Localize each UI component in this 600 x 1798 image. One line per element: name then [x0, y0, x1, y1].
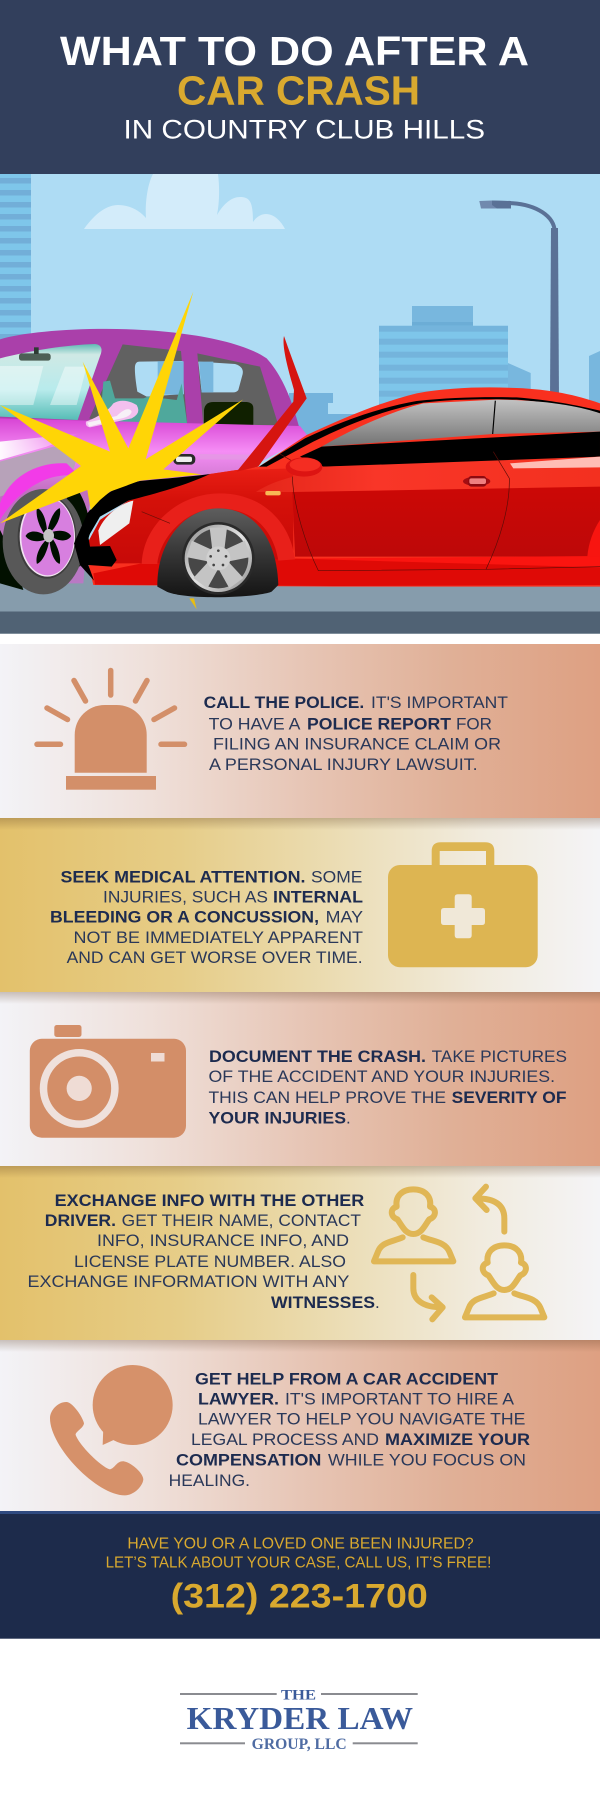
text: seek medical attention: AND CAN GET WORSE OVER TIME. [67, 948, 363, 967]
text: document the crash: SEVERITY OF [452, 1088, 566, 1107]
text: exchange info: . [375, 1293, 380, 1312]
text: get help from a lawyer: LEGAL PROCESS AND [191, 1430, 379, 1449]
text: get help from a lawyer: MAXIMIZE YOUR [385, 1430, 530, 1449]
text: seek medical attention: NOT BE IMMEDIATELY APPARENT [74, 928, 363, 947]
street lamp [479, 200, 559, 400]
road [0, 570, 600, 634]
text: seek medical attention [50, 867, 363, 967]
text: get help from a lawyer: WHILE YOU FOCUS ON [328, 1450, 526, 1470]
building left [0, 174, 31, 344]
text: call the police: A PERSONAL INJURY LAWSUIT. [209, 755, 478, 774]
icon: first aid kit [388, 842, 538, 967]
text: get help from a lawyer [169, 1370, 530, 1490]
building right [289, 306, 600, 440]
title line 1: WHAT TO DO AFTER A [60, 28, 529, 74]
icon: camera [30, 1025, 186, 1138]
panel: document the crash [0, 992, 600, 1166]
panel: call the police [0, 644, 600, 818]
text: seek medical attention: INTERNAL [273, 888, 363, 907]
icon: siren [37, 670, 184, 790]
illustration: car crash scene [0, 174, 600, 634]
text: exchange info: EXCHANGE INFORMATION WITH ANY [28, 1272, 349, 1291]
text: document the crash [208, 1047, 567, 1128]
black crushed bumper [74, 474, 210, 581]
text: call the police: IT'S IMPORTANT [371, 693, 508, 712]
text: exchange info: EXCHANGE INFO WITH THE OTHER [55, 1191, 364, 1210]
logo: the kryder law group: GROUP, LLC [252, 1736, 347, 1753]
starburst impact [0, 292, 243, 609]
text: call the police: POLICE REPORT [307, 714, 452, 733]
text: seek medical attention: INJURIES, SUCH AS [103, 888, 268, 907]
text: get help from a lawyer: IT'S IMPORTANT TO HIRE A [285, 1390, 515, 1408]
flat front tyre [157, 508, 278, 597]
cta line 1: HAVE YOU OR A LOVED ONE BEEN INJURED? [127, 1535, 474, 1552]
text: seek medical attention: SEEK MEDICAL ATTENTION. [60, 867, 306, 886]
purple car [0, 329, 308, 594]
panel: exchange info [0, 1166, 600, 1340]
text: exchange info [28, 1191, 380, 1312]
text: call the police: FOR [456, 714, 492, 733]
cta line 2: LET’S TALK ABOUT YOUR CASE, CALL US, IT’S FREE! [106, 1554, 491, 1572]
text: call the police: CALL THE POLICE. [204, 693, 364, 712]
text: call the police: FILING AN INSURANCE CLAIM OR [213, 734, 501, 753]
text: document the crash: OF THE ACCIDENT AND YOUR INJURIES. [208, 1067, 555, 1086]
text: document the crash: YOUR INJURIES [208, 1108, 346, 1128]
text: get help from a lawyer: GET HELP FROM A CAR ACCIDENT [195, 1370, 499, 1388]
text: exchange info: LICENSE PLATE NUMBER. ALSO [74, 1252, 346, 1271]
title line 3: IN COUNTRY CLUB HILLS [124, 115, 485, 145]
red car [74, 336, 600, 597]
text: exchange info: INFO, INSURANCE INFO, AND [97, 1231, 349, 1250]
text: document the crash: . [346, 1108, 351, 1128]
text: get help from a lawyer: LAWYER. [198, 1390, 279, 1408]
phone number: (312) 223-1700 [171, 1577, 428, 1615]
footer call to action [0, 1511, 600, 1639]
text: exchange info: WITNESSES [271, 1293, 375, 1312]
text: document the crash: DOCUMENT THE CRASH. [209, 1047, 426, 1066]
text: exchange info: DRIVER. [45, 1211, 116, 1230]
text: call the police [204, 693, 508, 774]
headlight [98, 501, 133, 545]
text: seek medical attention: SOME [311, 867, 362, 886]
text: get help from a lawyer: HEALING. [169, 1471, 250, 1490]
title line 2: CAR CRASH [177, 68, 420, 114]
panel: seek medical attention [0, 818, 600, 992]
logo: the kryder law group [180, 1688, 418, 1753]
text: get help from a lawyer: LAWYER TO HELP YOU NAVIGATE THE [198, 1410, 525, 1428]
text: seek medical attention: MAY [326, 907, 363, 926]
logo: the kryder law group: THE [281, 1688, 316, 1704]
icon: phone and speech bubble [50, 1365, 173, 1495]
text: call the police: TO HAVE A [209, 714, 301, 733]
text: get help from a lawyer: COMPENSATION [176, 1450, 321, 1470]
icon: two people exchanging [374, 1187, 544, 1319]
logo: the kryder law group: KRYDER LAW [187, 1700, 413, 1736]
raised hood [237, 336, 307, 472]
text: document the crash: TAKE PICTURES [432, 1047, 567, 1066]
text: seek medical attention: BLEEDING OR A CONCUSSION, [50, 907, 319, 926]
cloud [84, 174, 285, 229]
header banner [0, 0, 600, 174]
text: exchange info: GET THEIR NAME, CONTACT [122, 1211, 361, 1230]
panel: get help from a lawyer [0, 1340, 600, 1512]
text: document the crash: THIS CAN HELP PROVE THE [208, 1088, 446, 1107]
